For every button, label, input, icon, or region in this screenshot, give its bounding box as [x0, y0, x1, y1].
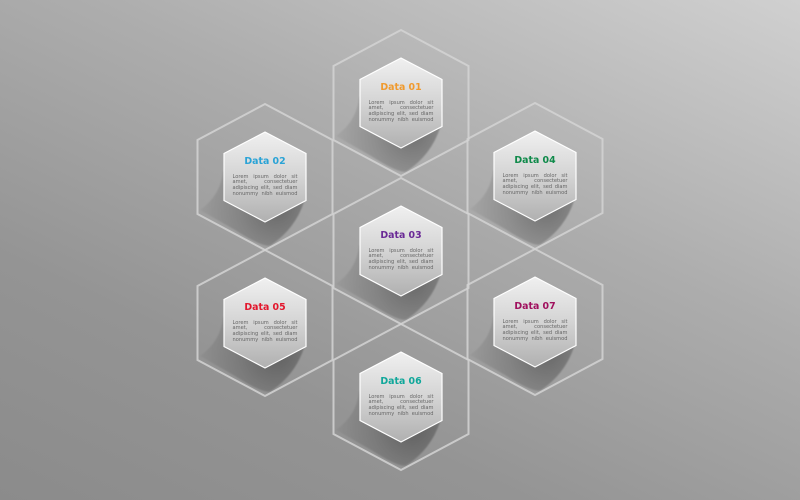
panel: Data 02 [196, 103, 334, 250]
panel: Data 04 [466, 102, 604, 249]
text block: Lorem ipsum dolor sit [502, 318, 568, 324]
text block: Lorem ipsum dolor sit [232, 174, 298, 180]
text block: adipiscing elit, sed diam [232, 331, 298, 337]
text block: Lorem ipsum dolor sit [368, 394, 434, 400]
text block [368, 248, 434, 271]
outer hexagon outline [334, 324, 468, 470]
text block: nonummy nibh euismod [368, 411, 434, 417]
text block: nonummy nibh euismod [502, 336, 568, 342]
long shadow [200, 317, 304, 392]
panel: Data 07 [466, 249, 604, 396]
text block: nonummy nibh euismod [232, 337, 298, 343]
hexagon face [360, 352, 442, 442]
text block: nonummy nibh euismod [232, 191, 298, 197]
heading: Data 05: Data 05 [244, 302, 286, 313]
text block: nonummy nibh euismod [368, 265, 434, 271]
text block: adipiscing elit, sed diam [368, 111, 434, 117]
text block: amet, consectetuer [368, 253, 434, 259]
text block: amet, consectetuer [232, 179, 298, 185]
long shadow [470, 170, 574, 245]
text block [232, 174, 298, 197]
text block: adipiscing elit, sed diam [368, 259, 434, 265]
text block: Lorem ipsum dolor sit [368, 100, 434, 106]
hexagon face [224, 132, 306, 222]
long shadow [336, 245, 440, 320]
outer hexagon outline [468, 103, 602, 249]
hexagon face [494, 277, 576, 367]
hexagon face [224, 278, 306, 368]
heading: Data 04: Data 04 [514, 155, 556, 166]
hexagon face [494, 131, 576, 221]
heading: Data 06: Data 06 [380, 376, 422, 387]
hexagon face [360, 58, 442, 148]
long shadow [336, 391, 440, 466]
text block: Lorem ipsum dolor sit [502, 172, 568, 178]
outer hexagon outline [468, 249, 602, 395]
text block: amet, consectetuer [502, 324, 568, 330]
panel: Data 01 [332, 29, 470, 177]
panel: Data 05 [196, 250, 334, 397]
text block: Lorem ipsum dolor sit [232, 320, 298, 326]
text block [368, 100, 434, 123]
text block: amet, consectetuer [368, 399, 434, 405]
outer hexagon outline [334, 178, 468, 324]
hexagon face [360, 206, 442, 296]
text block: adipiscing elit, sed diam [502, 330, 568, 336]
heading: Data 01: Data 01 [380, 82, 422, 93]
text block: nonummy nibh euismod [368, 117, 434, 123]
panel: Data 06 [332, 324, 470, 471]
outer hexagon outline [198, 250, 332, 396]
text block: Lorem ipsum dolor sit [368, 248, 434, 254]
heading: Data 07: Data 07 [514, 301, 556, 312]
heading: Data 02: Data 02 [244, 156, 286, 167]
text block [368, 394, 434, 417]
text block: adipiscing elit, sed diam [502, 184, 568, 190]
long shadow [470, 316, 574, 391]
text block: nonummy nibh euismod [502, 190, 568, 196]
outer hexagon outline [198, 104, 332, 250]
text block: amet, consectetuer [502, 178, 568, 184]
heading: Data 03: Data 03 [380, 230, 422, 241]
text block [502, 172, 568, 196]
text block [232, 320, 298, 343]
text block: adipiscing elit, sed diam [232, 185, 298, 191]
text block: amet, consectetuer [368, 105, 434, 111]
text block [502, 318, 568, 342]
panel: Data 03 [332, 177, 470, 324]
text block: adipiscing elit, sed diam [368, 405, 434, 411]
text block: amet, consectetuer [232, 325, 298, 331]
outer hexagon outline [334, 30, 468, 176]
long shadow [336, 97, 440, 172]
long shadow [200, 171, 304, 246]
